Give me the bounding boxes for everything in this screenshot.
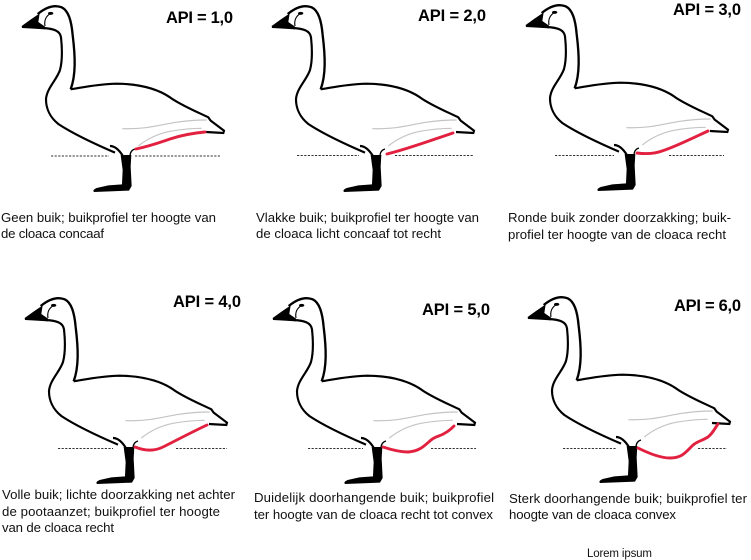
illustration: goose API 1: [22, 6, 224, 192]
heading: API 3: API = 3,0: [673, 1, 741, 19]
description: API 6: hoogte van de cloaca convex: [509, 507, 676, 522]
description: API 4: Volle buik; lichte doorzakking net achter: [2, 487, 236, 502]
description: API 2: [256, 210, 479, 241]
description: API 1: [1, 210, 216, 241]
panel: API 2,0: [256, 6, 486, 241]
illustration: goose API 5: [273, 298, 476, 484]
description: API 4: [2, 487, 236, 535]
panel: API 6,0: [509, 297, 748, 522]
description: API 4: van de cloaca recht: [2, 520, 114, 535]
panel: API 1,0: [1, 6, 233, 241]
illustration: goose API 4: [25, 298, 227, 484]
panel: API 3,0: [508, 1, 741, 242]
illustration: goose API 2: [272, 6, 474, 192]
heading: API 2: API = 2,0: [418, 7, 486, 25]
heading: API 1: API = 1,0: [166, 9, 233, 27]
description: API 3: profiel ter hoogte van de cloaca recht: [508, 227, 726, 242]
description: API 3: Ronde buik zonder doorzakking; buik-: [508, 210, 731, 225]
description: API 6: [509, 491, 748, 522]
footer text: Lorem ipsum: [587, 548, 652, 560]
illustration: goose API 6: [528, 297, 730, 483]
description: API 1: de cloaca concaaf: [1, 226, 104, 241]
heading: API 4: API = 4,0: [173, 293, 241, 311]
description: API 4: de pootaanzet; buikprofiel ter hoogte: [2, 504, 220, 519]
description: API 2: Vlakke buik; buikprofiel ter hoogte van: [256, 210, 479, 225]
panel: API 4,0: [2, 293, 241, 535]
description: API 6: Sterk doorhangende buik; buikprofiel ter: [509, 491, 748, 506]
description: API 5: [254, 490, 494, 522]
heading: API 5: API = 5,0: [422, 301, 490, 319]
panel: API 5,0: [254, 298, 494, 522]
heading: API 6: API = 6,0: [674, 297, 741, 315]
description: API 2: de cloaca licht concaaf tot recht: [256, 226, 441, 241]
description: API 5: Duidelijk doorhangende buik; buikprofiel: [254, 490, 494, 505]
description: API 1: Geen buik; buikprofiel ter hoogte van: [1, 210, 216, 225]
illustration: goose API 3: [526, 5, 728, 191]
description: API 5: ter hoogte van de cloaca recht tot convex: [254, 507, 493, 522]
description: API 3: [508, 210, 731, 242]
